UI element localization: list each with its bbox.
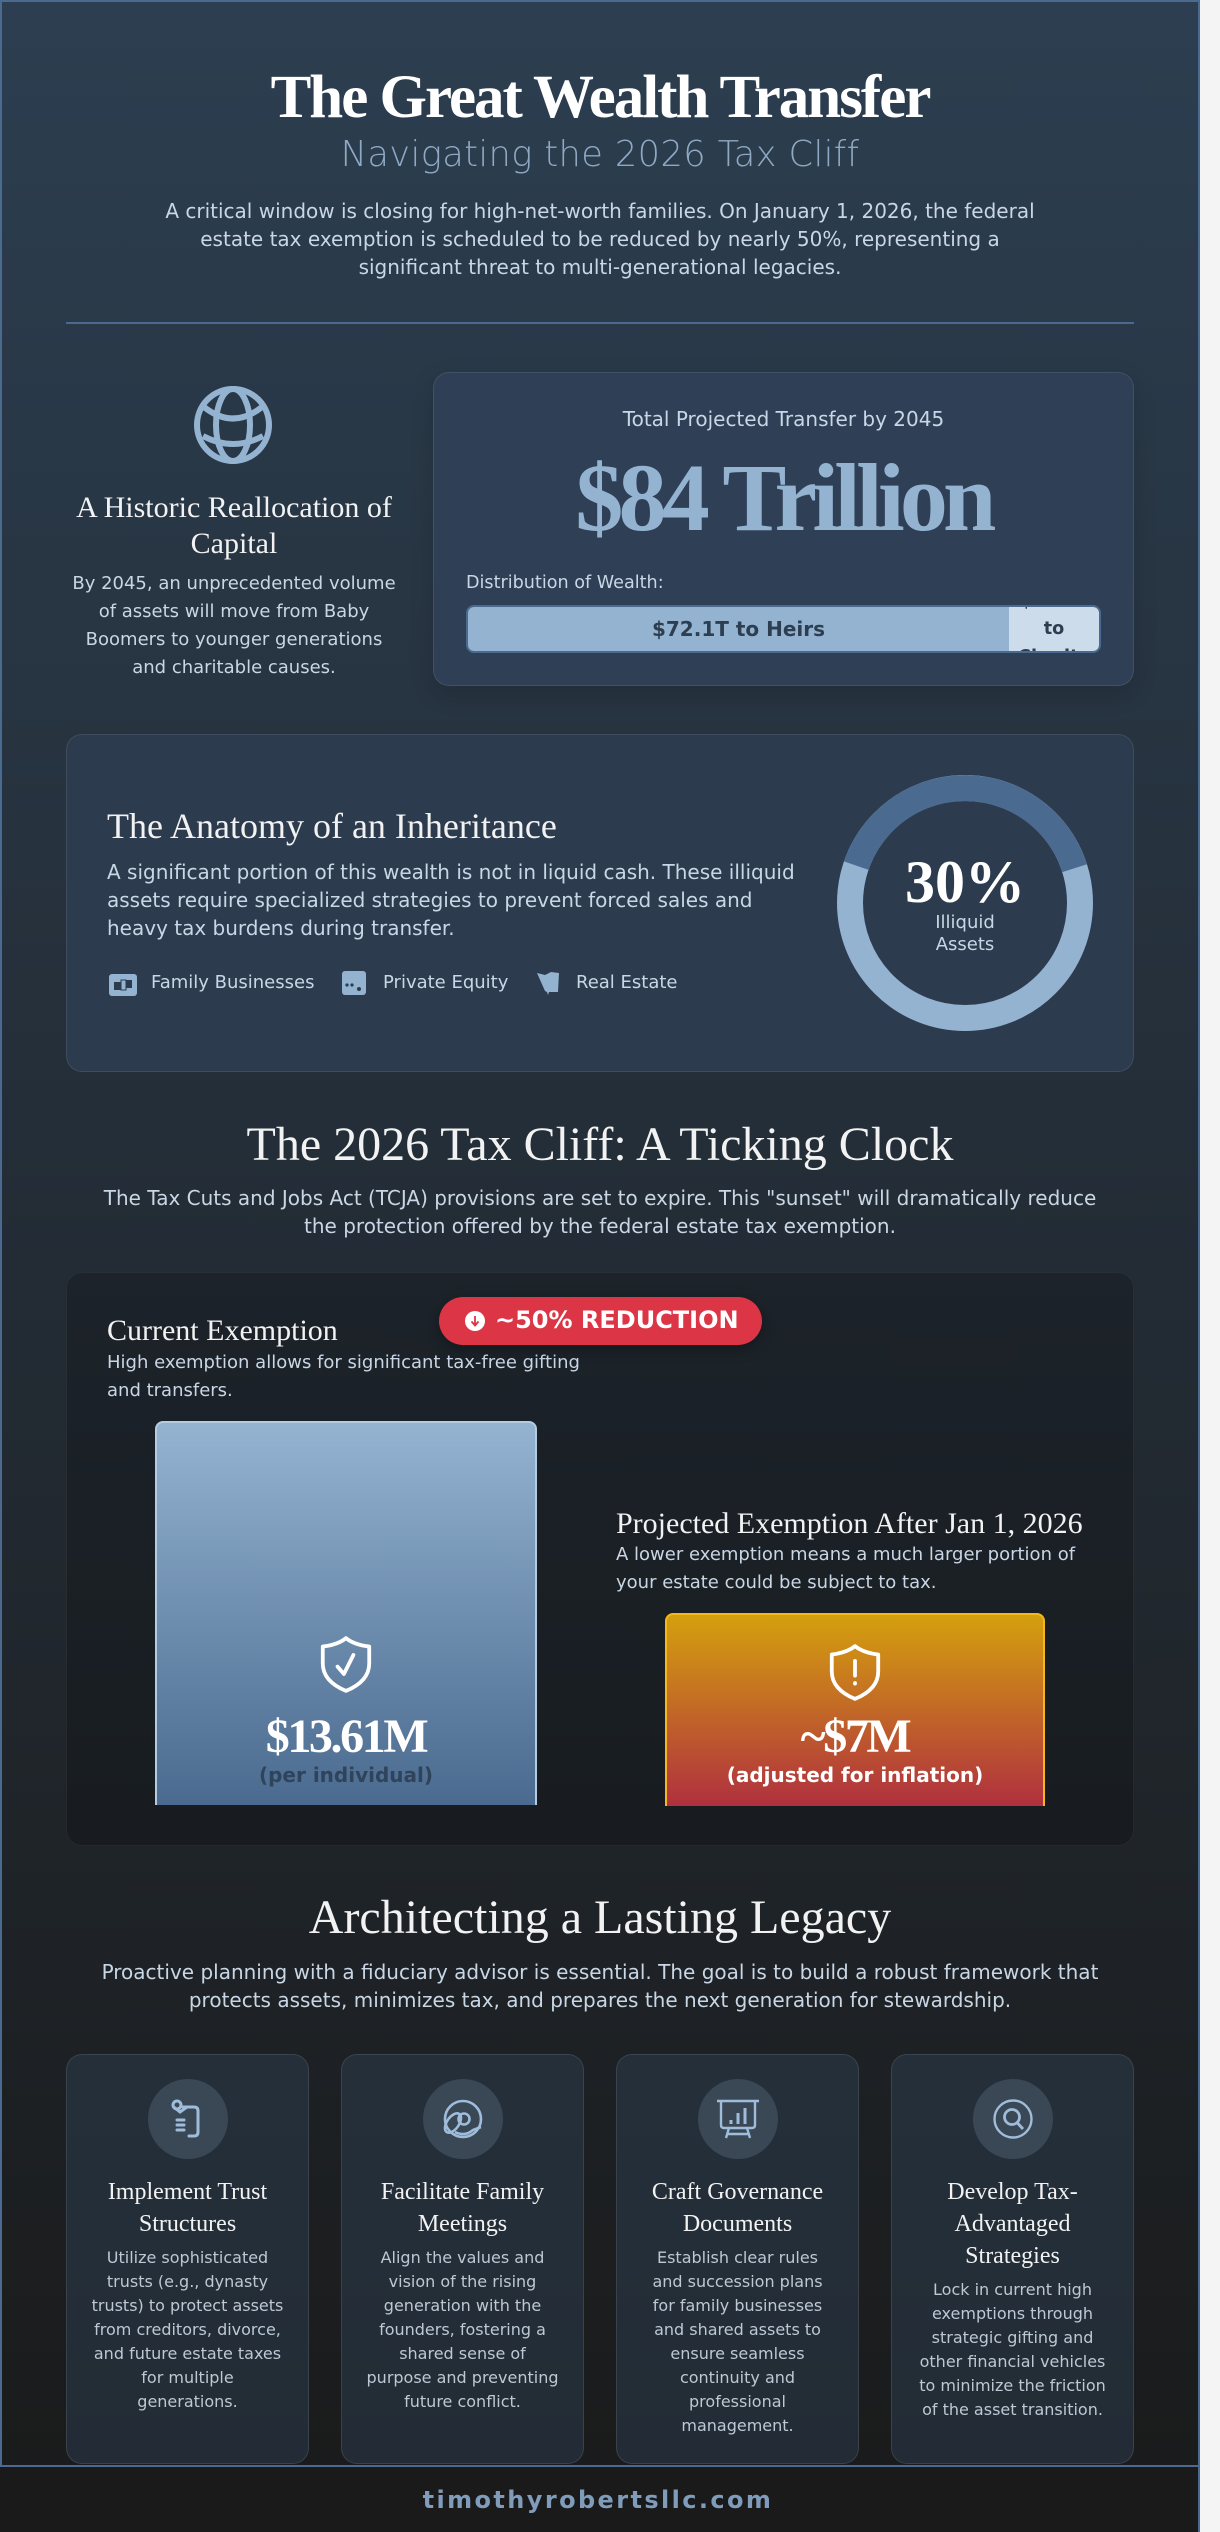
- card text: trusts) to protect assets: [92, 2296, 283, 2315]
- card text: vision of the rising: [389, 2272, 536, 2291]
- label: real estate: Real Estate: [576, 972, 678, 993]
- card text: to minimize the friction: [919, 2376, 1106, 2395]
- icon: real estate: [537, 972, 559, 995]
- icon: globe: [194, 386, 272, 464]
- card text: trusts (e.g., dynasty: [107, 2272, 268, 2291]
- heading: The Anatomy of an Inheritance: [107, 806, 557, 846]
- card text: ensure seamless: [670, 2344, 805, 2363]
- card title: Implement Trust: [108, 2179, 267, 2205]
- card title: Facilitate Family: [381, 2179, 544, 2205]
- description: [107, 860, 795, 940]
- text: projected exemption: A lower exemption means a much larger portion of: [616, 1544, 1075, 1565]
- card title: [381, 2179, 544, 2237]
- donut value: 30%: [905, 848, 1025, 914]
- title: The Great Wealth Transfer: [271, 64, 929, 131]
- heading: lasting legacy: Architecting a Lasting Legacy: [309, 1890, 891, 1944]
- card text: founders, fostering a: [379, 2320, 546, 2339]
- card text: of the asset transition.: [922, 2400, 1103, 2419]
- card title: [652, 2179, 823, 2237]
- card text: generations.: [137, 2392, 238, 2411]
- card text: [652, 2248, 823, 2435]
- card title: [108, 2179, 268, 2237]
- description: [72, 572, 396, 678]
- description: heavy tax burdens during transfer.: [107, 916, 455, 940]
- card text: exemptions through: [932, 2304, 1093, 2323]
- footer url: timothyrobertsllc.com: [423, 2486, 773, 2514]
- card text: Establish clear rules: [657, 2248, 818, 2267]
- text: projected exemption: your estate could be subject to tax.: [616, 1572, 936, 1593]
- card: family meetings: [341, 2054, 584, 2464]
- footer: [0, 2465, 1200, 2532]
- donut label: [935, 912, 995, 955]
- icon: family businesses: [109, 974, 137, 996]
- card: trust structures: [66, 2054, 309, 2464]
- text: tax cliff intro: The Tax Cuts and Jobs Act (TCJA) provisions are set to expire. This "sunset" will dramatically reduce: [104, 1186, 1096, 1210]
- icon: shield check: [320, 1636, 372, 1693]
- panel: total projected transfer: [433, 372, 1134, 686]
- card text: [919, 2280, 1106, 2419]
- big number: $84 Trillion: [575, 444, 992, 551]
- description: Boomers to younger generations: [86, 628, 382, 650]
- card text: generation with the: [384, 2296, 541, 2315]
- card text: future conflict.: [404, 2392, 521, 2411]
- card text: continuity and: [680, 2368, 795, 2387]
- distribution bar: [466, 605, 1101, 653]
- heading: A Historic Reallocation of: [76, 490, 392, 524]
- card text: [92, 2248, 283, 2411]
- card text: professional: [689, 2392, 786, 2411]
- card text: Align the values and: [381, 2248, 544, 2267]
- intro text: A critical window is closing for high-net-worth families. On January 1, 2026, the federal: [165, 199, 1035, 223]
- card text: and future estate taxes: [94, 2344, 281, 2363]
- description: of assets will move from Baby: [99, 600, 369, 622]
- icon: presentation board: [698, 2079, 778, 2159]
- segment: heirs: $72.1T to Heirs: [652, 617, 825, 641]
- card title: [947, 2179, 1078, 2269]
- text: current exemption: [107, 1352, 580, 1401]
- bar: current exemption: [155, 1421, 537, 1805]
- card: tax-advantaged strategies: [891, 2054, 1134, 2464]
- text: current exemption: and transfers.: [107, 1380, 233, 1401]
- card text: for family businesses: [653, 2296, 822, 2315]
- card text: other financial vehicles: [920, 2352, 1105, 2371]
- label: Total Projected Transfer by 2045: [623, 406, 944, 430]
- description: A significant portion of this wealth is not in liquid cash. These illiquid: [107, 860, 795, 884]
- text: lasting legacy intro: protects assets, minimizes tax, and prepares the next generation for stewardship.: [189, 1988, 1011, 2012]
- icon: shield warning: [830, 1644, 880, 1701]
- value: ~$7M: [801, 1710, 909, 1763]
- card text: from creditors, divorce,: [94, 2320, 281, 2339]
- icon: magnifier in circle: [972, 2079, 1052, 2159]
- value: $13.61M: [266, 1710, 426, 1763]
- badge: reduction: [439, 1297, 762, 1345]
- card title: Develop Tax-: [947, 2179, 1078, 2205]
- donut label: Illiquid: [935, 912, 995, 932]
- icon: down arrow: [465, 1311, 485, 1331]
- card text: Lock in current high: [933, 2280, 1092, 2299]
- donut label: Assets: [936, 934, 994, 955]
- card text: purpose and preventing: [367, 2368, 558, 2387]
- text: lasting legacy intro: [102, 1960, 1098, 2012]
- text: tax cliff intro: the protection offered by the federal estate tax exemption.: [304, 1214, 896, 1238]
- card text: strategic gifting and: [932, 2328, 1093, 2347]
- heading: tax cliff: The 2026 Tax Cliff: A Ticking Clock: [247, 1118, 953, 1170]
- card text: for multiple: [141, 2368, 234, 2387]
- unit: (per individual): [259, 1762, 433, 1786]
- distribution label: Distribution of Wealth:: [466, 573, 664, 593]
- intro text: significant threat to multi-generational legacies.: [359, 255, 841, 279]
- text: projected exemption: [616, 1544, 1076, 1593]
- icon: family circles: [422, 2079, 502, 2159]
- heading: current exemption: Current Exemption: [107, 1314, 338, 1347]
- badge text: ~50% REDUCTION: [495, 1306, 739, 1334]
- bar: projected exemption: [665, 1613, 1045, 1806]
- icon: private equity: [342, 971, 366, 995]
- intro text: [165, 199, 1035, 279]
- unit: (adjusted for inflation): [727, 1762, 983, 1786]
- segment: heirs: [468, 607, 1009, 651]
- card title: Advantaged: [955, 2211, 1070, 2237]
- label: family businesses: Family Businesses: [151, 972, 314, 993]
- subtitle: Navigating the 2026 Tax Cliff: [341, 134, 859, 175]
- card title: Documents: [683, 2211, 792, 2237]
- panel: historic reallocation: [72, 386, 396, 678]
- description: assets require specialized strategies to prevent forced sales and: [107, 888, 752, 912]
- icon: trust key and document: [148, 2079, 228, 2159]
- heading: projected exemption: Projected Exemption After Jan 1, 2026: [616, 1506, 1083, 1540]
- card text: management.: [681, 2416, 794, 2435]
- heading: Capital: [191, 526, 277, 560]
- text: lasting legacy intro: Proactive planning with a fiduciary advisor is essential. The goal is to build a robust framework that: [102, 1960, 1098, 1984]
- card text: and succession plans: [652, 2272, 823, 2291]
- label: private equity: Private Equity: [383, 972, 508, 993]
- card title: Strategies: [965, 2243, 1060, 2269]
- card title: Structures: [139, 2211, 236, 2237]
- card text: shared sense of: [399, 2344, 526, 2363]
- card: governance documents: [616, 2054, 859, 2464]
- text: tax cliff intro: [104, 1186, 1096, 1238]
- text: current exemption: High exemption allows for significant tax-free gifting: [107, 1352, 580, 1373]
- card title: Meetings: [418, 2211, 507, 2237]
- card text: Utilize sophisticated: [107, 2248, 268, 2267]
- card text: [367, 2248, 558, 2411]
- card title: Craft Governance: [652, 2179, 823, 2205]
- panel: exemption comparison: [66, 1272, 1134, 1846]
- description: By 2045, an unprecedented volume: [72, 572, 396, 594]
- intro text: estate tax exemption is scheduled to be reduced by nearly 50%, representing a: [200, 227, 1000, 251]
- heading: [76, 490, 392, 560]
- panel: anatomy of an inheritance: [66, 734, 1134, 1072]
- donut chart: [837, 775, 1093, 1031]
- description: and charitable causes.: [132, 656, 336, 678]
- card text: and shared assets to: [654, 2320, 821, 2339]
